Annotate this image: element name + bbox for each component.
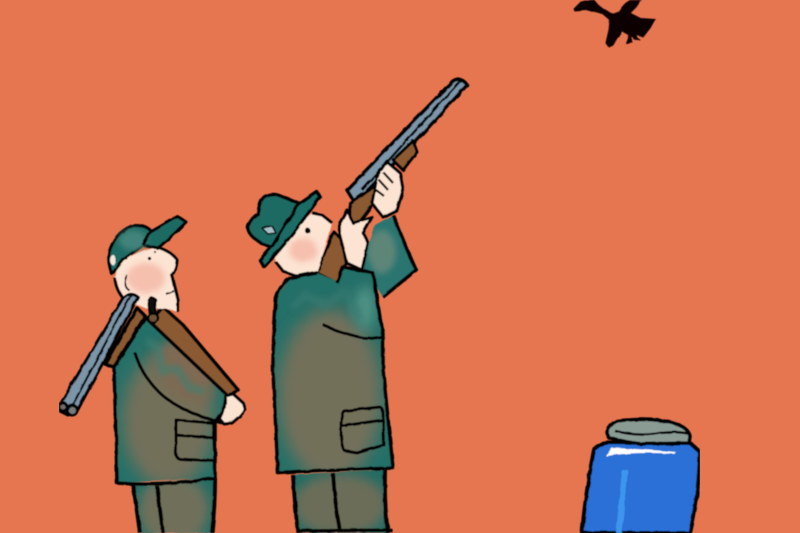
- raised far hand: [372, 162, 403, 217]
- stock at cheek: [317, 232, 346, 283]
- bird: [574, 0, 655, 47]
- face: [272, 213, 332, 276]
- hat: [248, 192, 320, 267]
- trousers: [130, 478, 218, 533]
- hunter: right, aiming at the bird: [248, 79, 467, 533]
- blue jar: [582, 420, 700, 533]
- pocket: [175, 420, 215, 461]
- sleeve line: [135, 353, 222, 423]
- trousers: [290, 469, 394, 533]
- shotgun: [347, 79, 467, 224]
- cap: [109, 216, 186, 274]
- shotgun stock: [105, 307, 238, 398]
- jar lid: [607, 420, 690, 444]
- sleeve line: [323, 325, 383, 339]
- jar highlight: [616, 470, 628, 533]
- shotgun barrels: [59, 294, 138, 415]
- far sleeve: [363, 215, 416, 297]
- jacket: [105, 315, 230, 490]
- hand: [220, 394, 245, 424]
- head: [115, 247, 178, 312]
- hunter: left, with shotgun on shoulder: [59, 216, 245, 533]
- jacket: [268, 262, 398, 481]
- near hand: [340, 210, 372, 270]
- gun breech: [148, 298, 158, 323]
- pocket: [341, 407, 384, 453]
